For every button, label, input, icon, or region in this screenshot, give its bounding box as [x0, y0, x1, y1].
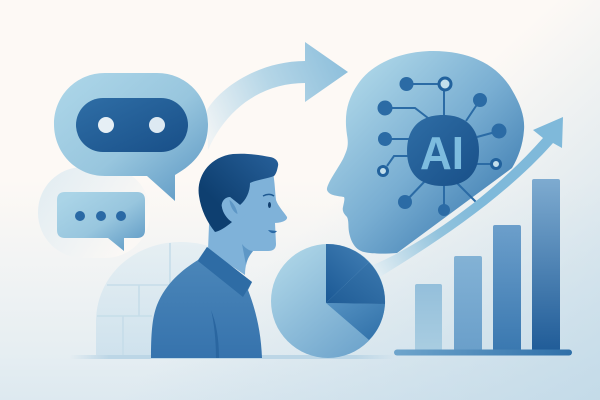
neck shadow: [242, 244, 253, 265]
robot eye left: [98, 117, 114, 133]
hair: [199, 154, 278, 232]
robot face pill: [76, 98, 188, 152]
growth arrow: [373, 117, 563, 277]
chart baseline: [394, 350, 572, 356]
eye: [268, 202, 271, 208]
AI head: [327, 51, 524, 254]
brick arch: [96, 242, 222, 355]
collar: [198, 247, 252, 297]
person: [151, 154, 287, 358]
shirt placket: [211, 310, 219, 358]
pie slice: mid blue: [326, 262, 385, 304]
eyebrow: [263, 194, 274, 196]
pie slice: dark blue: [326, 244, 369, 303]
curved arrow: top: [207, 42, 348, 150]
pie chart: [271, 244, 385, 358]
bar chart: [394, 179, 572, 356]
ground shadow line: [70, 355, 395, 359]
pale bubble backdrop: [38, 167, 150, 258]
neural network lines: [385, 84, 499, 210]
shirt: [151, 247, 262, 358]
pie slice: light blue: [326, 303, 385, 340]
AI label: AI: [420, 127, 464, 179]
chat bubble: small dots: [57, 192, 145, 251]
neural network nodes: [378, 77, 506, 216]
AI chip: [407, 115, 479, 186]
neural network ring nodes: [378, 78, 500, 176]
ear: [222, 197, 246, 222]
robot eye right: [149, 117, 165, 133]
neck and face: [208, 165, 287, 275]
mouth: [268, 230, 277, 233]
chat bubble: robot: [54, 73, 208, 201]
